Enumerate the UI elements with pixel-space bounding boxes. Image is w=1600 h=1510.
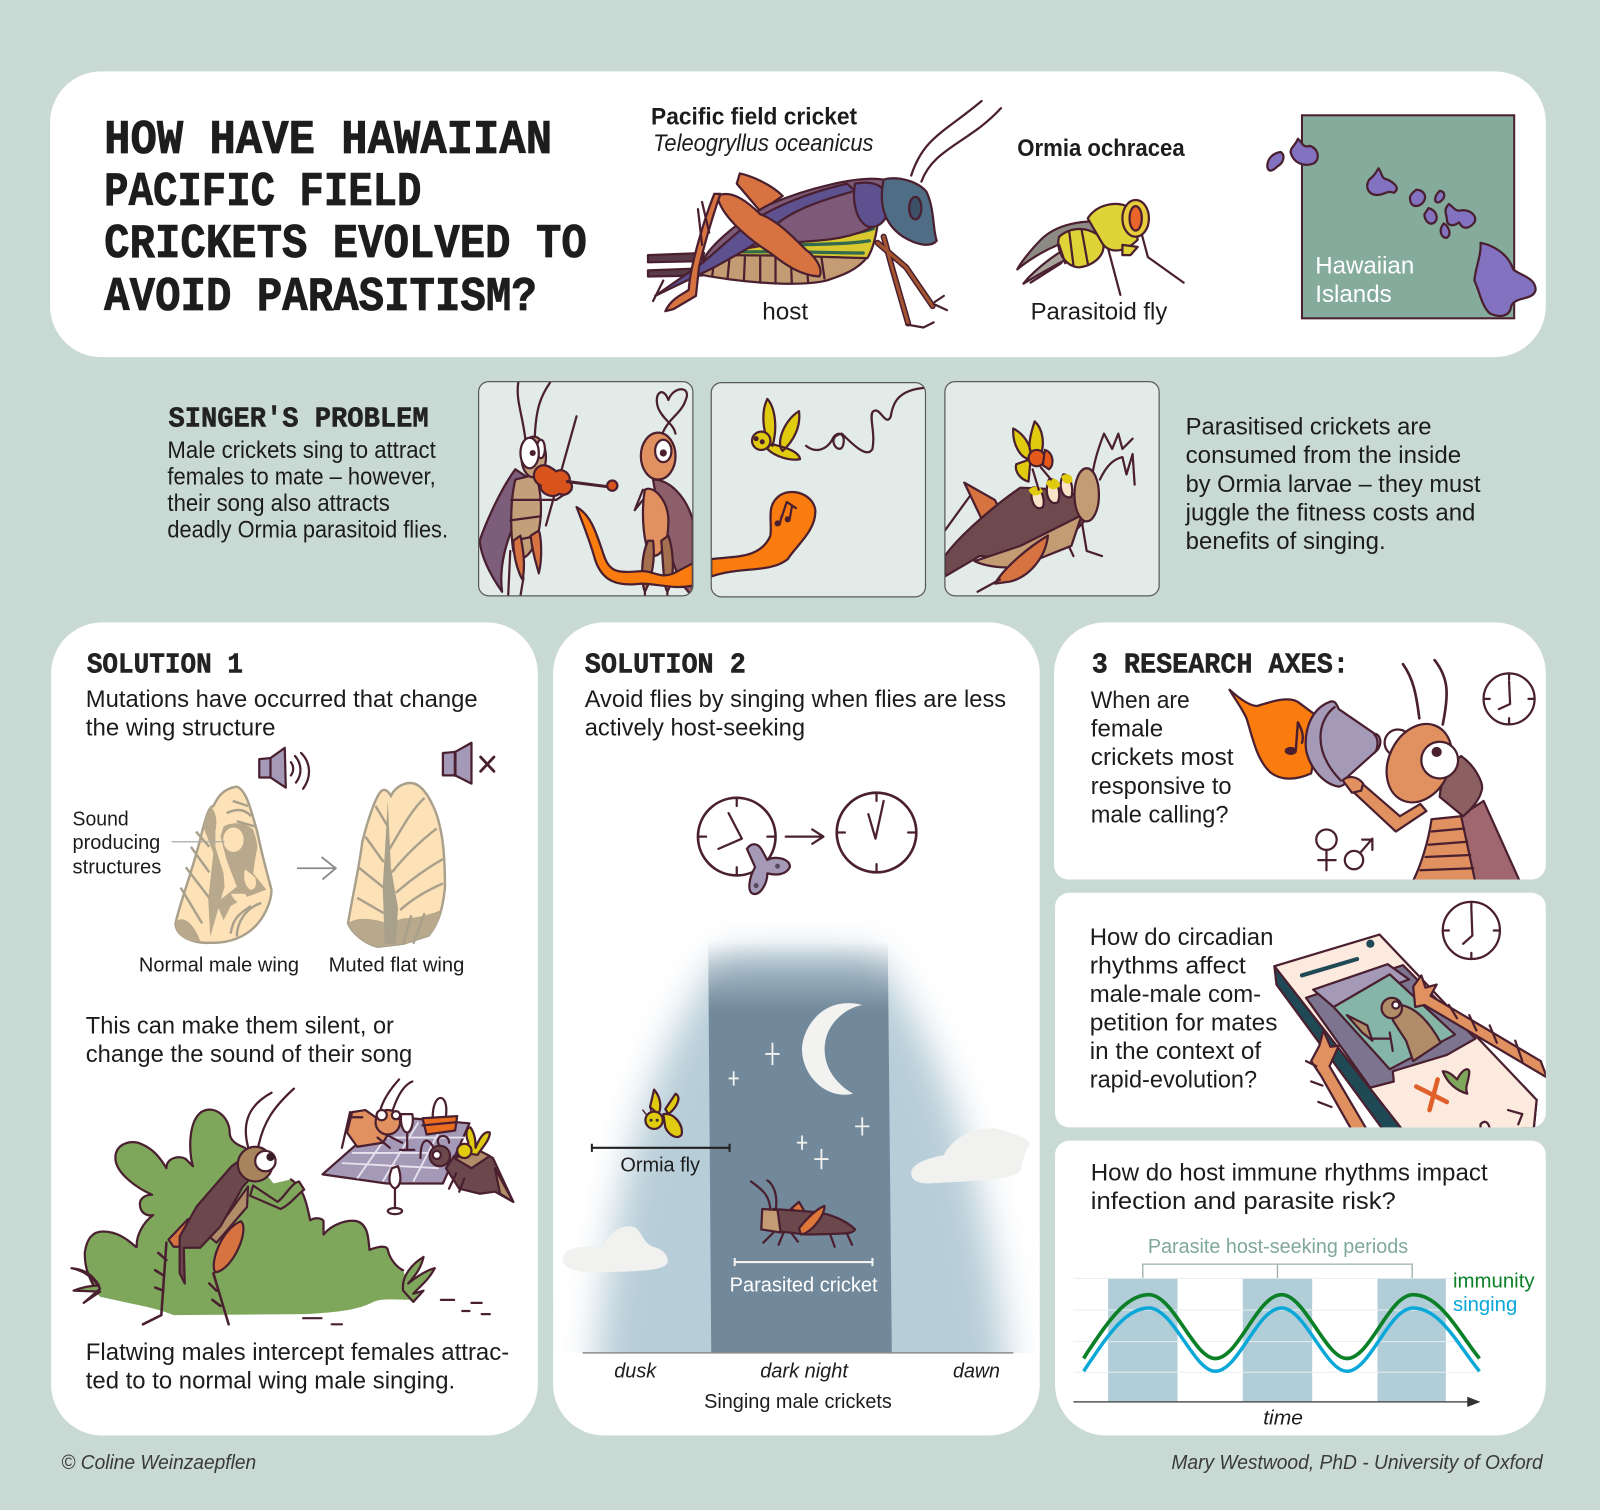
title: HOW HAVE HAWAIIAN [104,114,552,168]
chart: singing activity by time [562,942,1030,1449]
text: mutations [86,686,478,742]
text: when are females responsive: male calling? [1091,801,1229,828]
title: AVOID PARASITISM? [104,271,537,325]
text: when are females responsive [1091,687,1234,828]
song ribbon [577,507,693,587]
icon: singing cricket [751,1180,855,1247]
text: immune rhythms [1091,1159,1488,1215]
text: circadian rhythms [1090,924,1277,1094]
text block: singer's problem: their song also attracts [167,490,390,517]
arrow: clock shift [786,829,823,844]
map: hawaiian islands [1267,115,1536,318]
map: hawaiian islands: Hawaiian [1315,252,1414,279]
label: ormia ochracea: Ormia ochracea [1017,135,1185,162]
icon: clock with key [698,798,790,894]
legend: immunity: immunity [1453,1271,1535,1293]
label: sound producing structures: structures [73,856,161,878]
line chart: immunity and singing [1073,1278,1481,1407]
text: mutations: Mutations have occurred that change [86,686,478,713]
islands [1267,139,1536,316]
label: sound producing structures: producing [73,832,160,854]
text: circadian rhythms: male-male com- [1090,981,1261,1008]
moon [802,1003,862,1095]
label: sound producing structures: Sound [73,808,129,830]
comic panel: parasitised cricket [945,382,1159,596]
label: pacific field cricket: Pacific field cricket [651,103,857,130]
text: circadian rhythms: rapid-evolution? [1090,1067,1257,1094]
bracket: ormia fly [592,1144,730,1152]
cloud: left [562,1226,668,1272]
comic panel: cricket playing violin [479,382,693,596]
panel: solution 1 [51,622,538,1436]
text: avoid flies [585,686,1006,742]
bracket: periods [1143,1264,1412,1278]
icon: song blob [1230,690,1321,779]
ear trumpet [1306,701,1380,787]
label: parasite host-seeking periods: Parasite host-seeking periods [1148,1236,1408,1258]
label: normal male wing: Normal male wing [139,954,299,976]
map: hawaiian islands: Islands [1315,281,1392,308]
text: silent: This can make them silent, or [86,1013,394,1040]
text: avoid flies: Avoid flies by singing when flies are less [585,686,1006,713]
label: host: host [762,298,808,325]
label: parasited cricket: Parasited cricket [730,1275,878,1297]
label: ormia fly: Ormia fly [620,1154,701,1176]
grass tufts [72,1268,100,1303]
illustration: phone with hands [1274,935,1547,1130]
text: circadian rhythms: petition for mates [1090,1009,1277,1036]
text: flatwing: Flatwing males intercept females attrac- [86,1339,509,1366]
text block: singer's problem: females to mate – however, [167,464,436,491]
axis label: time: time [1263,1407,1303,1429]
title [104,114,587,325]
text: avoid flies: actively host-seeking [585,715,805,742]
text block: parasitised crickets: consumed from the inside [1186,442,1461,469]
icon: speaker sounding [259,748,309,789]
axis labels [614,1360,1000,1413]
text: when are females responsive: crickets most [1091,744,1234,771]
text: circadian rhythms: How do circadian [1090,924,1273,951]
icon: parasitoid fly [1017,200,1184,295]
title: CRICKETS EVOLVED TO [104,218,587,272]
text: immune rhythms: infection and parasite risk? [1091,1188,1396,1215]
icon: female and male symbols [1316,829,1372,870]
label: pacific field cricket: Teleogryllus oceanicus [653,130,873,157]
axis labels: dark night [760,1360,849,1382]
cloud: right [911,1128,1030,1184]
axis labels: Singing male crickets [704,1391,892,1413]
arrow: wing to wing [297,857,336,879]
text block: singer's problem [167,402,448,544]
wing: muted flat [348,783,445,947]
text block: parasitised crickets [1185,414,1481,555]
icon: clock [837,793,916,872]
text: when are females responsive: female [1091,716,1163,743]
axis labels: dawn [953,1360,1000,1382]
text block: parasitised crickets: juggle the fitness costs and [1185,499,1475,526]
label: pacific field cricket [651,103,873,157]
text block: parasitised crickets: by Ormia larvae – they must [1186,471,1481,498]
fly [752,399,800,460]
stars [729,1043,869,1169]
panel: research axis 1 [1054,622,1546,883]
text: circadian rhythms: rhythms affect [1090,952,1246,979]
text: when are females responsive: When are [1091,687,1190,714]
text: silent [86,1013,412,1068]
illustration: bush [72,1110,490,1324]
axis labels: dusk [614,1360,658,1382]
label: sound producing structures [73,808,161,878]
illustration: picnic [323,1079,513,1214]
icon: clock [1443,902,1500,959]
text block: singer's problem: SINGER'S PROBLEM [168,402,429,435]
heading: solution 1: SOLUTION 1 [87,648,243,681]
icon: clock [1484,673,1535,724]
icon: speaker muted [443,743,494,784]
text block: parasitised crickets: Parasitised crickets are [1186,414,1432,441]
leader line [172,841,225,843]
heading: solution 2: SOLUTION 2 [585,648,746,681]
wing: normal male [176,787,272,943]
panel: title header [50,71,1546,357]
icon: ormia fly [643,1090,682,1137]
text block: parasitised crickets: benefits of singing. [1186,528,1386,555]
label: parasitoid fly: Parasitoid fly [1031,298,1167,325]
text: flatwing [86,1339,509,1395]
credit: author: Mary Westwood, PhD - University of Oxford [1171,1452,1543,1474]
title: PACIFIC FIELD [104,166,421,220]
label: muted flat wing: Muted flat wing [329,954,464,976]
comic panel: fly hears song [711,383,925,597]
text: immune rhythms: How do host immune rhythms impact [1091,1159,1488,1186]
illustration: flatwing cricket on bush [143,1089,304,1324]
text block: singer's problem: deadly Ormia parasitoid flies. [167,517,448,544]
bracket: parasited cricket [735,1258,872,1266]
axis [583,1352,1013,1354]
text: when are females responsive: responsive to [1091,773,1232,800]
fly on cricket [1013,421,1053,490]
text: flatwing: ted to to normal wing male singing. [86,1368,455,1395]
heading: 3 research axes: 3 RESEARCH AXES: [1092,648,1349,681]
panel: research axis 3 [1055,1141,1546,1436]
panel: solution 2 [553,622,1040,1449]
legend: singing: singing [1453,1294,1517,1316]
text: silent: change the sound of their song [86,1041,412,1068]
text: circadian rhythms: in the context of [1090,1038,1261,1065]
icon: host cricket [648,101,1001,328]
panel: research axis 2 [1055,893,1547,1130]
note blob [711,492,815,576]
text: mutations: the wing structure [86,715,276,742]
text block: singer's problem: Male crickets sing to attract [167,437,436,464]
illustration: female cricket with ear trumpet [1306,660,1520,883]
credit: illustrator: © Coline Weinzaepflen [61,1452,256,1474]
